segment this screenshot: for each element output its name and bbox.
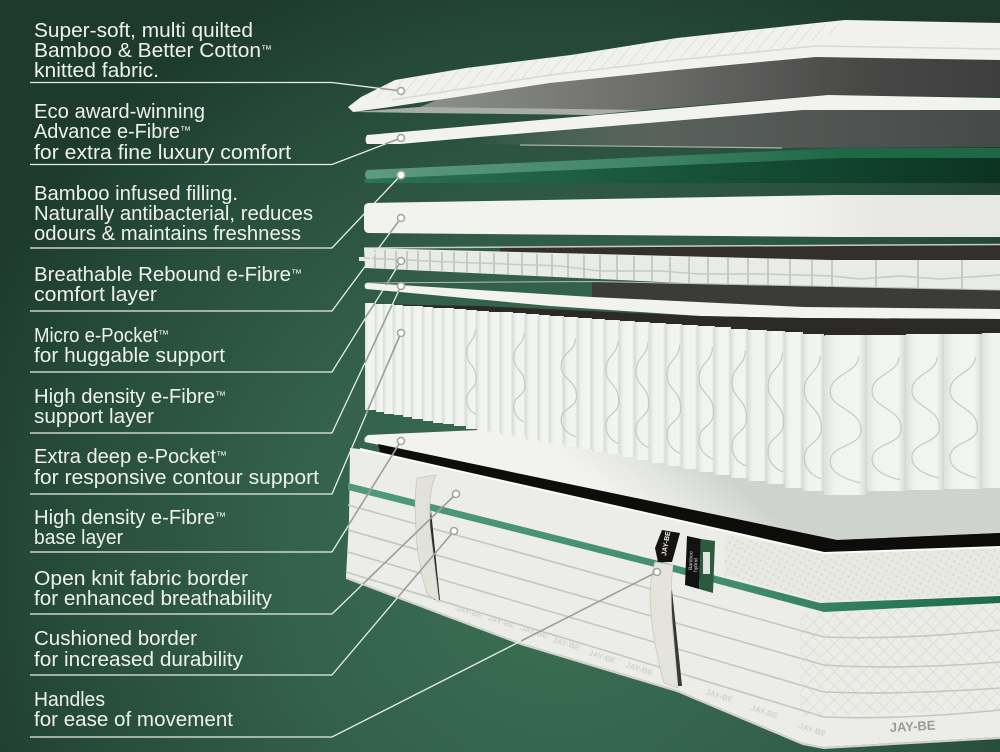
- leader line 6: [30, 286, 401, 433]
- product label tag: [685, 536, 715, 593]
- text: base layer: base layer: [34, 527, 123, 549]
- text: bamboo filling: Naturally antibacterial, reduces: [34, 203, 313, 225]
- text: bamboo filling: Bamboo infused filling.: [34, 183, 238, 205]
- text: handles: [34, 689, 233, 731]
- green stripe: [348, 483, 1000, 612]
- border logos: JAY-BE: [749, 703, 780, 721]
- text: cushioned border: Cushioned border: [34, 628, 197, 650]
- border logos: JAY-BE: [704, 687, 735, 705]
- black brand tag: [655, 530, 680, 562]
- text: advance e-fibre: Eco award-winning: [34, 101, 205, 123]
- layer: high density support: [364, 282, 1000, 319]
- layer: breathable rebound e-fibre: [364, 195, 1000, 237]
- text: support layer: [34, 386, 226, 428]
- quilted seams: [346, 505, 1000, 718]
- layer: quilted fabric: [348, 20, 1000, 115]
- cushioned quilting: [800, 603, 1000, 717]
- text: base layer: High density e-Fibre: [34, 507, 215, 529]
- leader line 7: [30, 333, 401, 494]
- layer: bamboo infused filling: [364, 148, 1000, 183]
- black gap: [378, 444, 1000, 558]
- text: base layer: ™: [215, 511, 226, 523]
- border logos: JAY-BE: [551, 635, 582, 653]
- text: cushioned border: [34, 628, 243, 671]
- text: rebound e-fibre: comfort layer: [34, 284, 157, 306]
- layer: extra deep e-pocket: [365, 303, 1000, 495]
- text: cushioned border: for increased durability: [34, 649, 243, 671]
- leader line 4: [30, 218, 401, 311]
- text: advance e-fibre: Advance e-Fibre: [34, 121, 180, 143]
- border logos: JAY-BE: [587, 648, 618, 666]
- text: super-soft fabric: knitted fabric.: [34, 60, 159, 82]
- text: support layer: High density e-Fibre: [34, 386, 215, 408]
- handle right: [650, 562, 682, 688]
- border logos: JAY-BE: [519, 623, 550, 641]
- text: open knit border: [34, 568, 272, 610]
- leader line 5: [30, 261, 401, 372]
- text: open knit border: Open knit fabric border: [34, 568, 248, 590]
- text: rebound e-fibre: Breathable Rebound e-Fibre: [34, 264, 291, 286]
- layer: advance e-fibre: [366, 95, 1000, 148]
- text: handles: Handles: [34, 689, 105, 711]
- border logos: JAY-BE: [454, 603, 485, 621]
- handle left: [415, 475, 440, 602]
- text: super-soft fabric: [34, 20, 272, 82]
- text: rebound e-fibre: ™: [291, 268, 302, 280]
- text: micro e-pocket: for huggable support: [34, 345, 225, 367]
- leader line 8: [30, 441, 401, 552]
- product label tag: Bamboo: [688, 551, 695, 570]
- brand logo: JAY-BE: [889, 718, 936, 735]
- text: extra deep e-pocket: ™: [216, 450, 227, 462]
- leader line 9: [30, 494, 456, 614]
- border logos: JAY-BE: [486, 613, 517, 631]
- leader line 11: [30, 572, 657, 737]
- leader line 10: [30, 531, 454, 675]
- text: base layer: [34, 507, 226, 549]
- text: advance e-fibre: for extra fine luxury comfort: [34, 142, 291, 164]
- text: rebound e-fibre: [34, 264, 302, 306]
- text: extra deep e-pocket: [34, 446, 319, 489]
- layer: micro e-pocket: [359, 244, 1000, 290]
- leader line 1: [30, 82, 401, 91]
- border logos: JAY-BE: [624, 660, 655, 678]
- text: advance e-fibre: [34, 101, 291, 164]
- leader line 2: [30, 138, 401, 164]
- mattress base: [346, 448, 1000, 748]
- text: micro e-pocket: [34, 325, 225, 367]
- leader line 3: [30, 175, 401, 248]
- text: bamboo filling: [34, 183, 313, 245]
- product label tag: hybrid: [693, 558, 699, 572]
- text: extra deep e-pocket: Extra deep e-Pocket: [34, 446, 216, 468]
- black brand tag: JAY-BE: [661, 531, 672, 556]
- text: handles: for ease of movement: [34, 709, 233, 731]
- text: bamboo filling: odours & maintains freshness: [34, 223, 301, 245]
- text: super-soft fabric: Super-soft, multi quilted: [34, 20, 253, 42]
- text: micro e-pocket: Micro e-Pocket: [34, 325, 158, 347]
- text: extra deep e-pocket: for responsive contour support: [34, 467, 319, 489]
- text: support layer: support layer: [34, 406, 154, 428]
- border logos: [454, 603, 828, 739]
- knit border: [725, 535, 1000, 601]
- border logos: JAY-BE: [797, 721, 828, 739]
- layer: high density base layer: [364, 430, 1000, 540]
- text: super-soft fabric: Bamboo & Better Cotton: [34, 40, 261, 62]
- text: advance e-fibre: ™: [180, 125, 191, 137]
- text: super-soft fabric: ™: [261, 44, 272, 56]
- text: open knit border: for enhanced breathability: [34, 588, 272, 610]
- marker dots: [397, 88, 660, 576]
- text: support layer: ™: [215, 390, 226, 402]
- text: micro e-pocket: ™: [158, 329, 169, 341]
